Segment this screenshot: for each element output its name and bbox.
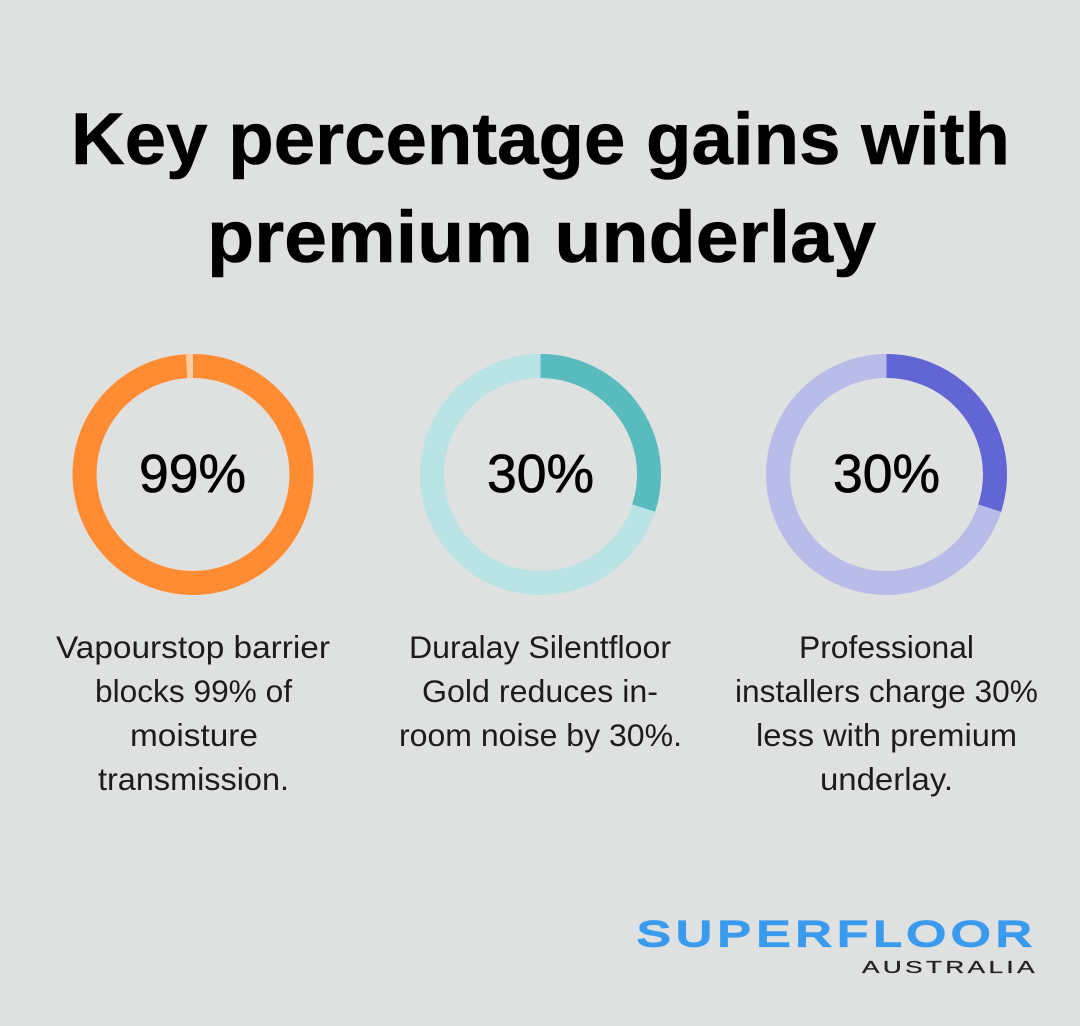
panel: noise reduction stat — [399, 366, 682, 753]
description: noise reduction: Duralay Silentfloor — [409, 629, 671, 665]
description: installer cost: less with premium — [756, 717, 1017, 753]
title — [71, 99, 1010, 278]
donut chart: 30% indigo: 30% — [833, 444, 940, 504]
description: noise reduction — [399, 629, 682, 753]
donut chart: 99% — [84, 366, 302, 583]
title: premium underlay — [207, 197, 876, 278]
description: moisture barrier: Vapourstop barrier — [56, 629, 330, 665]
panel: moisture barrier stat — [56, 366, 330, 797]
title: Key percentage gains with — [71, 99, 1010, 180]
description: moisture barrier: moisture — [130, 717, 258, 753]
description: noise reduction: Gold reduces in- — [422, 673, 658, 709]
donut chart: 30% teal — [432, 366, 649, 583]
description: installer cost: installers charge 30% — [735, 673, 1038, 709]
donut chart: 30% indigo — [778, 366, 995, 583]
panel: installer cost stat — [735, 366, 1038, 797]
description: installer cost: Professional — [799, 629, 974, 665]
description: installer cost — [735, 629, 1038, 797]
description: noise reduction: room noise by 30%. — [399, 717, 682, 753]
logo: Superfloor Australia: SUPERFLOOR — [637, 915, 1032, 954]
logo: Superfloor Australia — [637, 915, 1035, 977]
description: installer cost: underlay. — [820, 761, 953, 797]
logo: Superfloor Australia: AUSTRALIA — [862, 957, 1035, 977]
donut chart: 99%: 99% — [139, 444, 246, 504]
description: moisture barrier — [56, 629, 330, 797]
description: moisture barrier: blocks 99% of — [95, 673, 292, 709]
donut chart: 30% teal: 30% — [487, 444, 594, 504]
description: moisture barrier: transmission. — [98, 761, 289, 797]
